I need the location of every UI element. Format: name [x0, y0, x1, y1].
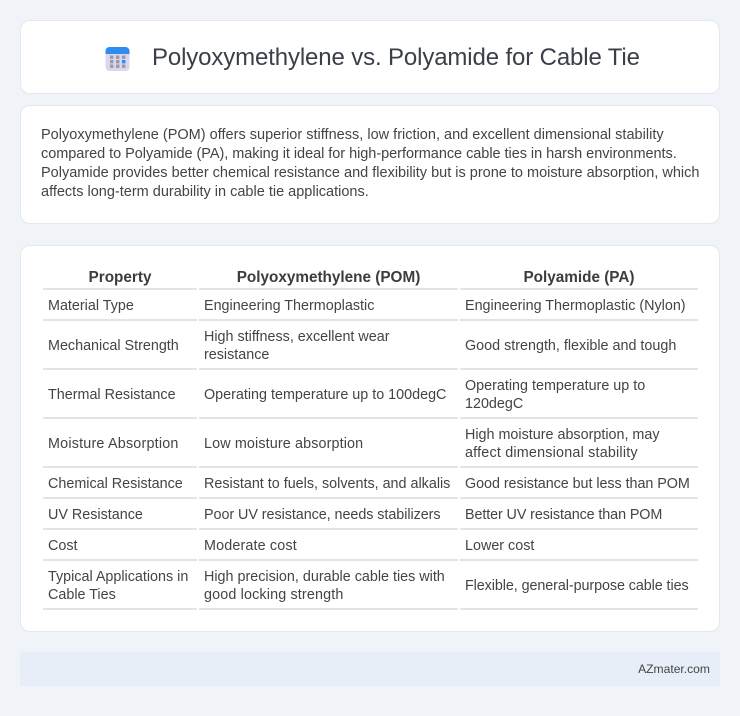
row: Typical Applications: good locking strength: [204, 587, 344, 603]
row: Thermal Resistance: Operating temperature up to: [465, 378, 645, 394]
row: Mechanical Strength: Mechanical Strength: [48, 338, 179, 354]
row: Mechanical Strength: High stiffness, excellent wear: [204, 329, 390, 345]
row: Thermal Resistance: Thermal Resistance: [48, 387, 176, 403]
row: Chemical Resistance: Resistant to fuels, solvents, and alkalis: [204, 476, 450, 492]
row: Typical Applications: Flexible, general-purpose cable ties: [465, 578, 689, 594]
row: UV Resistance: UV Resistance: [48, 507, 143, 523]
row: Chemical Resistance: Chemical Resistance: [48, 476, 183, 492]
row: Mechanical Strength: Good strength, flexible and tough: [465, 338, 676, 354]
intro paragraph: Polyoxymethylene (POM) offers superior stiffness, low friction, and excellent dimensional stability: [41, 127, 664, 143]
row: Typical Applications: [48, 569, 689, 603]
icon: calendar: [106, 47, 130, 71]
row: Material Type: Engineering Thermoplastic: [204, 298, 374, 314]
row: Chemical Resistance: [48, 476, 690, 492]
row: Chemical Resistance: Good resistance but less than POM: [465, 476, 690, 492]
row: Thermal Resistance: [48, 378, 645, 412]
header panel: [20, 20, 720, 94]
footer bar: [20, 652, 720, 686]
intro paragraph: Polyamide provides better chemical resistance and flexibility but is prone to moisture absorption, which: [41, 165, 699, 181]
row: Typical Applications: High precision, durable cable ties with: [204, 569, 445, 585]
row: Moisture Absorption: Moisture Absorption: [48, 436, 179, 452]
title: Polyoxymethylene vs. Polyamide for Cable Tie: [152, 44, 640, 71]
row: Typical Applications: Cable Ties: [48, 587, 116, 603]
row: Moisture Absorption: affect dimensional stability: [465, 445, 638, 461]
row: Thermal Resistance: 120degC: [465, 396, 523, 412]
table header row: Polyamide (PA): [523, 269, 635, 286]
table header row: Polyoxymethylene (POM): [237, 269, 420, 286]
row: Moisture Absorption: High moisture absorption, may: [465, 427, 660, 443]
intro paragraph: compared to Polyamide (PA), making it ideal for high-performance cable ties in harsh environments.: [41, 146, 677, 162]
intro text panel: [20, 105, 720, 224]
comparison table: [43, 269, 698, 610]
row: Material Type: Material Type: [48, 298, 134, 314]
row: Cost: [48, 538, 534, 554]
row: Cost: Cost: [48, 538, 78, 554]
intro paragraph: [41, 127, 699, 200]
row: UV Resistance: [48, 507, 662, 523]
row: Moisture Absorption: Low moisture absorption: [204, 436, 363, 452]
row: Material Type: [48, 298, 686, 314]
row: Moisture Absorption: [48, 427, 660, 461]
row: Cost: Lower cost: [465, 538, 534, 554]
footer credit: AZmater.com: [638, 662, 710, 676]
table header row: [89, 269, 635, 286]
row: Mechanical Strength: resistance: [204, 347, 269, 363]
row: Material Type: Engineering Thermoplastic (Nylon): [465, 298, 686, 314]
row: Mechanical Strength: [48, 329, 676, 363]
row: Cost: Moderate cost: [204, 538, 297, 554]
comparison table panel: [20, 245, 720, 632]
row: Thermal Resistance: Operating temperature up to 100degC: [204, 387, 446, 403]
row: UV Resistance: Better UV resistance than POM: [465, 507, 662, 523]
intro paragraph: affects long-term durability in cable tie applications.: [41, 184, 369, 200]
table header row: Property: [89, 269, 151, 286]
row: UV Resistance: Poor UV resistance, needs stabilizers: [204, 507, 441, 523]
row: Typical Applications: Typical Applications in: [48, 569, 188, 585]
